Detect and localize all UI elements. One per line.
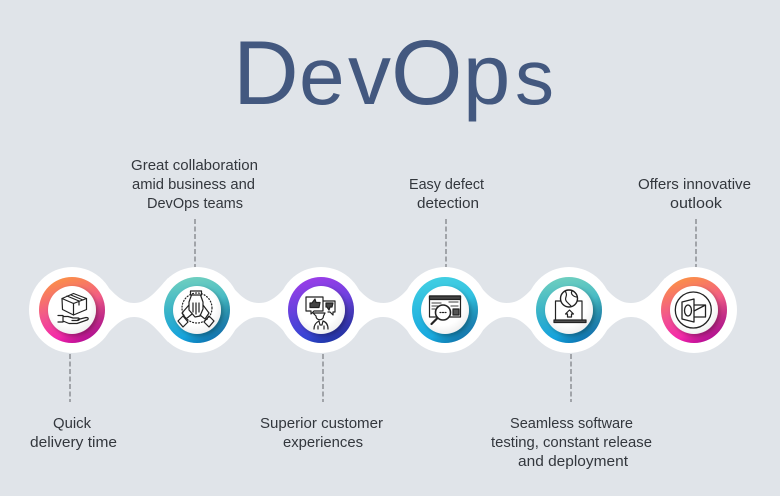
label: seamless software testing: Seamless software	[510, 415, 633, 432]
leader line: quick delivery	[69, 354, 71, 402]
node 6: innovative outlook	[661, 277, 727, 343]
node 1: quick delivery	[39, 277, 105, 343]
title: e	[299, 31, 345, 122]
label: superior customer experiences: Superior customer	[260, 415, 383, 432]
label: easy defect detection: Easy defect	[409, 176, 485, 193]
label: great collaboration	[131, 157, 258, 212]
label: quick delivery time	[30, 415, 117, 451]
icon: browser window and magnifier	[430, 296, 460, 324]
title: v	[348, 27, 391, 123]
icon: three joined hands	[178, 291, 214, 327]
label: great collaboration: Great collaboration	[131, 157, 258, 174]
label: superior customer experiences	[260, 415, 383, 451]
label: seamless software testing: and deployment	[518, 453, 629, 470]
icon: outlook logo in circle	[675, 292, 711, 328]
node 2: collaboration	[164, 277, 230, 343]
icon: customer with feedback bubbles	[306, 297, 335, 329]
label: innovative outlook: outlook	[670, 195, 723, 212]
label: great collaboration: amid business and	[132, 176, 255, 193]
node 3: customer experience	[288, 277, 354, 343]
white connector band	[29, 267, 737, 353]
title: p	[463, 28, 510, 123]
label: seamless software testing	[491, 415, 652, 470]
leader line: defect detection	[445, 219, 447, 267]
title: O	[391, 22, 463, 124]
title: s	[515, 33, 554, 121]
label: quick delivery time: delivery time	[30, 434, 117, 451]
label: great collaboration: DevOps teams	[147, 195, 243, 212]
node 4: defect detection	[412, 277, 478, 343]
node 5: seamless testing	[536, 277, 602, 343]
label: easy defect detection: detection	[417, 195, 479, 212]
leader line: customer experiences	[322, 354, 324, 402]
icon: box on open hand	[58, 294, 88, 324]
label: seamless software testing: testing, constant release	[491, 434, 652, 451]
label: superior customer experiences: experiences	[283, 434, 363, 451]
label: quick delivery time: Quick	[53, 415, 91, 432]
leader line: collaboration	[194, 219, 196, 267]
label: innovative outlook	[638, 176, 751, 212]
leader line: seamless testing	[570, 354, 572, 402]
label: innovative outlook: Offers innovative	[638, 176, 751, 193]
leader line: innovative outlook	[695, 219, 697, 267]
icon: laptop with globe and upload arrow	[554, 290, 586, 322]
title: D	[233, 23, 299, 124]
label: easy defect detection	[409, 176, 485, 212]
